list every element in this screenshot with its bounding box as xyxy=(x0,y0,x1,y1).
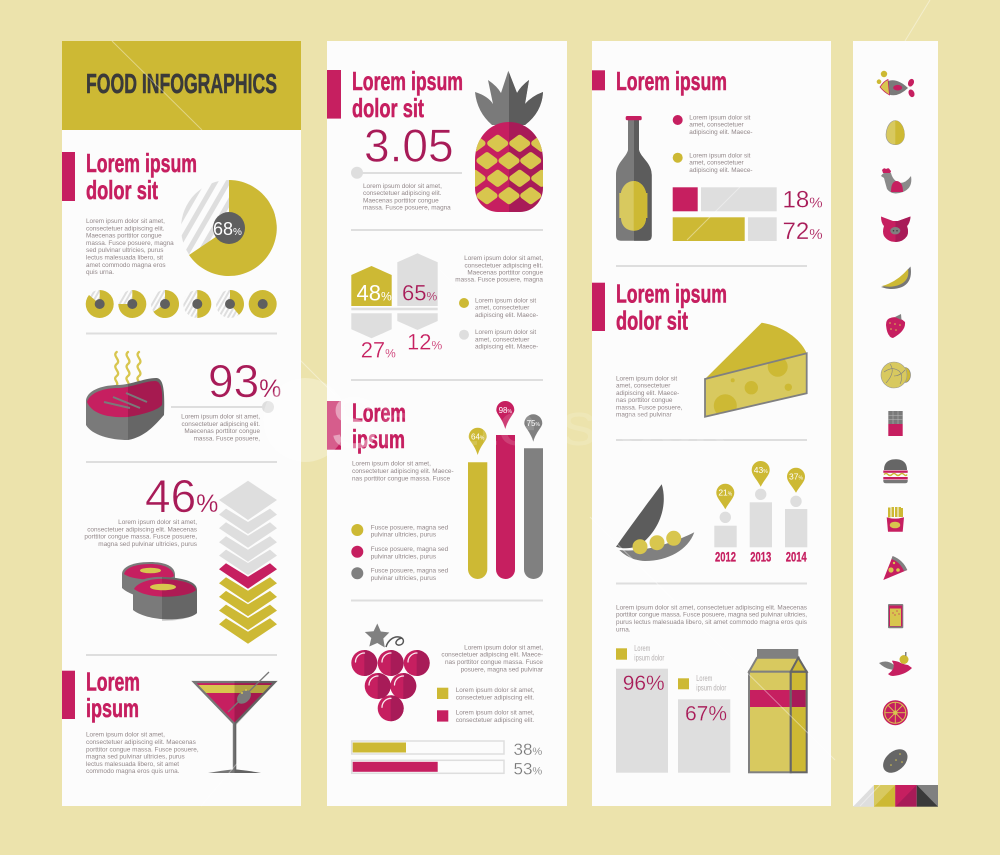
heading: lorem ipsum xyxy=(327,398,406,454)
pie chart: 68%: 68% xyxy=(213,219,242,239)
stat: 93% xyxy=(171,355,281,442)
legend: vertical bars xyxy=(351,524,449,582)
legend: grapes xyxy=(437,687,535,724)
heading: lorem ipsum dolor sit: dolor sit xyxy=(86,175,158,205)
text block: grapes: nas porttitor congue massa. Fusce xyxy=(445,659,543,666)
chart: rounded vertical bars xyxy=(468,401,543,579)
legend: beer: Lorem ipsum dolor sit xyxy=(689,114,751,121)
heading: pineapple section: dolor sit xyxy=(352,93,424,123)
text block: cocktail xyxy=(86,732,199,775)
stat: 3.05: Lorem ipsum dolor sit amet, xyxy=(363,183,442,190)
legend: beer: amet, consectetuer xyxy=(689,160,745,167)
chart: hexagon bars: 48% xyxy=(356,281,392,306)
icon: pig xyxy=(881,216,910,242)
legend: vertical bars: Fusce posuere, magna sed xyxy=(371,568,449,575)
chart: milk bars 96% and 67%: ipsum dolor xyxy=(634,654,665,663)
icon: pizza slice xyxy=(883,556,907,580)
icon: hen xyxy=(881,168,911,193)
icon: potato xyxy=(879,745,912,777)
icon: fries xyxy=(887,507,904,532)
text block: bars xyxy=(352,461,454,482)
chart: milk bars 96% and 67% xyxy=(616,644,730,773)
icon: orange slice xyxy=(883,700,908,725)
heading: cheese section: dolor sit xyxy=(616,305,688,335)
legend: grapes: consectetuer adipiscing elit. xyxy=(456,717,534,724)
chart: yearly bars with pins: 2012 xyxy=(715,549,736,565)
text block: cocktail: magna sed pulvinar ultricies, purus xyxy=(86,754,185,761)
chevron stack xyxy=(219,481,277,644)
stat: 3.05: 3.05 xyxy=(364,120,454,172)
chart: hexagon bars: 27% xyxy=(361,338,396,363)
legend: hexagon chart: amet, consectetuer xyxy=(475,305,530,312)
chart: split bars 18% and 72% xyxy=(673,186,823,245)
stat: 46%: consectetuer adipiscing elit. Maecenas xyxy=(87,526,197,533)
chart: rounded vertical bars: 98% xyxy=(499,406,513,415)
text block: cheese: magna sed pulvinar xyxy=(616,412,673,419)
legend: hexagon chart: Lorem ipsum dolor sit xyxy=(475,297,536,304)
pie chart: 68% xyxy=(181,180,277,276)
icon: pineapple xyxy=(475,70,543,212)
text block: intro: amet commodo magna eros xyxy=(86,262,166,269)
title band: FOOD INFOGRAPHICS xyxy=(86,68,277,99)
legend: hexagon chart: amet, consectetuer xyxy=(475,336,530,343)
legend: vertical bars: Fusce posuere, magna sed xyxy=(371,546,449,553)
stat: 46% xyxy=(84,470,218,548)
heading: pineapple section xyxy=(327,66,463,123)
text block: bars: Lorem ipsum dolor sit amet, xyxy=(352,461,431,468)
chart: rounded vertical bars: 75% xyxy=(527,419,541,428)
stat: 46%: porttitor congue massa. Fusce posuere, xyxy=(84,534,197,541)
chart: hexagon bars: 12% xyxy=(407,329,442,354)
text block: grapes: posuere, magna sed pulvinar xyxy=(461,666,544,673)
chart: horizontal progress bars: 38% xyxy=(514,740,542,759)
text block: intro: lectus malesuada libero, sit xyxy=(86,254,163,262)
icon: martini glass xyxy=(192,672,277,773)
heading: lorem ipsum: Lorem xyxy=(86,667,140,697)
chart: horizontal progress bars: 53% xyxy=(514,759,542,778)
heading: pineapple section: Lorem ipsum xyxy=(352,66,463,96)
heading: lorem ipsum: ipsum xyxy=(352,424,405,454)
text block: intro: quis urna. xyxy=(86,269,114,276)
icon: melon slice xyxy=(881,266,911,289)
chart: milk bars 96% and 67%: 67% xyxy=(685,702,727,725)
stat: 93%: Maecenas porttitor congue xyxy=(184,428,260,435)
icon: tuna steaks xyxy=(122,562,197,621)
text block: grapes: Lorem ipsum dolor sit amet, xyxy=(464,645,543,652)
legend: hexagon chart xyxy=(459,297,538,351)
legend: grapes: Lorem ipsum dolor sit amet, xyxy=(456,710,535,717)
legend: grapes: Lorem ipsum dolor sit amet, xyxy=(456,687,535,694)
icon: milk carton xyxy=(749,649,807,772)
text block: intro: massa. Fusce posuere, magna xyxy=(86,240,174,247)
heading: cheese section: Lorem ipsum xyxy=(616,279,727,309)
chart: milk bars 96% and 67%: 96% xyxy=(623,672,665,695)
legend: hexagon chart: adipiscing elit. Maece- xyxy=(475,312,538,319)
text block: hexagon description xyxy=(455,255,543,284)
text block: hexagon description: Maecenas porttitor congue xyxy=(467,269,543,276)
chart: milk bars 96% and 67%: ipsum dolor xyxy=(696,684,727,693)
small pie charts row xyxy=(86,290,277,318)
text block: bars: consectetuer adipiscing elit. Maece- xyxy=(352,468,454,475)
heading: lorem ipsum: ipsum xyxy=(86,693,139,723)
text block: milk paragraph xyxy=(616,604,807,633)
chart: milk bars 96% and 67%: Lorem xyxy=(634,644,651,653)
legend: vertical bars: pulvinar ultricies, purus xyxy=(371,575,436,582)
stat: 93%: consectetuer adipiscing elit. xyxy=(181,421,260,428)
stat: 93%: Lorem ipsum dolor sit amet, xyxy=(181,414,260,420)
chart: yearly bars with pins: 37% xyxy=(789,472,804,482)
icon: grapes xyxy=(351,624,430,721)
legend: beer: adipiscing elit. Maece- xyxy=(689,167,753,174)
heading: beer section xyxy=(592,66,727,96)
panel: third column xyxy=(592,41,831,806)
chart: horizontal progress bars xyxy=(352,740,542,778)
panel: second column xyxy=(327,41,567,806)
icon: pea pod xyxy=(616,484,694,561)
stat: 3.05: massa. Fusce posuere, magna xyxy=(363,205,451,212)
chart: hexagon bars xyxy=(351,253,442,363)
chart: yearly bars with pins: 43% xyxy=(754,465,768,475)
chart: milk bars 96% and 67%: Lorem xyxy=(696,674,713,683)
legend: grapes: consectetuer adipiscing elit. xyxy=(456,694,534,701)
chart: yearly bars with pins: 21% xyxy=(718,488,733,498)
icon: egg xyxy=(886,120,904,145)
text block: cheese xyxy=(616,375,683,419)
legend: vertical bars: pulvinar ultricies, purus xyxy=(371,532,436,539)
stat: 93%: 93% xyxy=(208,355,281,407)
text block: cocktail: lectus malesuada libero, sit amet xyxy=(86,761,179,768)
text block: hexagon description: massa. Fusce posuere, magna xyxy=(455,277,543,284)
icon: banana xyxy=(879,652,912,676)
heading: lorem ipsum: Lorem xyxy=(352,398,406,428)
legend: beer: adipiscing elit. Maece- xyxy=(689,129,753,136)
chart: hexagon bars: 65% xyxy=(402,281,437,306)
heading: beer section: Lorem ipsum xyxy=(616,66,727,96)
stat: 3.05: consectetuer adipiscing elit. xyxy=(363,190,442,197)
stat: 93%: massa. Fusce posuere, xyxy=(194,435,260,442)
heading: cheese section xyxy=(592,279,727,335)
text block: cheese: amet, consectetuer xyxy=(616,383,671,390)
stat: 46%: magna sed pulvinar ultricies, purus xyxy=(98,541,197,548)
stat: 46%: 46% xyxy=(145,470,218,522)
text block: cocktail: consectetuer adipiscing elit. Maecenas xyxy=(86,739,196,746)
icon: chocolate bar xyxy=(888,411,903,436)
watermark overlay: hutterstock xyxy=(378,391,729,458)
icon: strawberry xyxy=(886,314,905,338)
chart: yearly bars with pins: 2013 xyxy=(750,549,771,565)
heading: lorem ipsum dolor sit xyxy=(62,148,197,205)
text block: cheese: massa. Fusce posuere, xyxy=(616,404,683,411)
colour swatch strip xyxy=(853,785,938,807)
text block: intro xyxy=(86,218,174,276)
text block: bars: nas porttitor congue massa. Fusce xyxy=(352,475,450,482)
legend: vertical bars: Fusce posuere, magna sed xyxy=(371,524,449,531)
legend: hexagon chart: adipiscing elit. Maece- xyxy=(475,344,538,351)
text block: milk paragraph: urna. xyxy=(616,626,631,633)
legend: beer: Lorem ipsum dolor sit xyxy=(689,152,751,159)
icon: cabbage xyxy=(881,362,910,388)
heading: lorem ipsum dolor sit: Lorem ipsum xyxy=(86,148,197,178)
icon: beer bottle xyxy=(616,116,652,241)
chart: yearly bars with pins xyxy=(714,461,807,565)
stat: 3.05: Maecenas porttitor congue xyxy=(363,198,439,204)
text block: hexagon description: consectetuer adipiscing elit. xyxy=(464,262,543,269)
legend: vertical bars: pulvinar ultricies, purus xyxy=(371,553,436,560)
stat: 3.05 xyxy=(351,120,462,212)
watermark overlay xyxy=(112,0,930,806)
legend: beer xyxy=(673,114,753,174)
legend: hexagon chart: Lorem ipsum dolor sit xyxy=(475,329,536,336)
text block: intro: Maecenas porttitor congue xyxy=(86,233,162,240)
text block: cocktail: porttitor congue massa. Fusce posuere, xyxy=(86,746,199,753)
icon: fish xyxy=(877,71,916,98)
chart: yearly bars with pins: 2014 xyxy=(786,549,807,565)
title band xyxy=(62,41,301,130)
text block: cocktail: commodo magna eros quis urna. xyxy=(86,768,180,775)
watermark overlay: S xyxy=(330,384,378,464)
text block: hexagon description: Lorem ipsum dolor sit amet, xyxy=(464,255,543,262)
icon: cheese wedge xyxy=(705,323,807,417)
icon: burger xyxy=(883,459,908,483)
panel: icon column xyxy=(853,41,938,807)
icon: juice glass xyxy=(888,604,903,628)
text block: grapes: consectetuer adipiscing elit. Maece- xyxy=(441,652,543,659)
text block: cheese: adipiscing elit. Maece- xyxy=(616,390,679,397)
chart: split bars 18% and 72%: 72% xyxy=(782,218,823,245)
text block: milk paragraph: Lorem ipsum dolor sit amet, consectetuer adipiscing elit. Maecenas xyxy=(616,604,807,611)
text block: cocktail: Lorem ipsum dolor sit amet, xyxy=(86,732,165,739)
panel: left column xyxy=(62,41,301,806)
text block: intro: sed pulvinar ultricies, purus xyxy=(86,247,163,254)
icon: grilled steak xyxy=(86,352,164,440)
legend: beer: amet, consectetuer xyxy=(689,122,745,129)
text block: intro: consectetuer adipiscing elit. xyxy=(86,225,165,232)
text block: cheese: Lorem ipsum dolor sit xyxy=(616,375,677,382)
chart: split bars 18% and 72%: 18% xyxy=(782,186,823,213)
text block: intro: Lorem ipsum dolor sit amet, xyxy=(86,218,165,225)
stat: 46%: Lorem ipsum dolor sit amet, xyxy=(118,519,197,526)
text block: milk paragraph: purus lectus malesuada libero, sit amet commodo magna eros quis xyxy=(616,619,807,626)
text block: cheese: nas porttitor congue xyxy=(616,397,673,404)
heading: lorem ipsum xyxy=(62,667,140,723)
text block: milk paragraph: porttitor congue massa. Fusce posuere, magna sed pulvinar ultricies, xyxy=(616,612,807,619)
chart: rounded vertical bars: 64% xyxy=(471,432,485,442)
text block: grapes xyxy=(441,645,544,673)
